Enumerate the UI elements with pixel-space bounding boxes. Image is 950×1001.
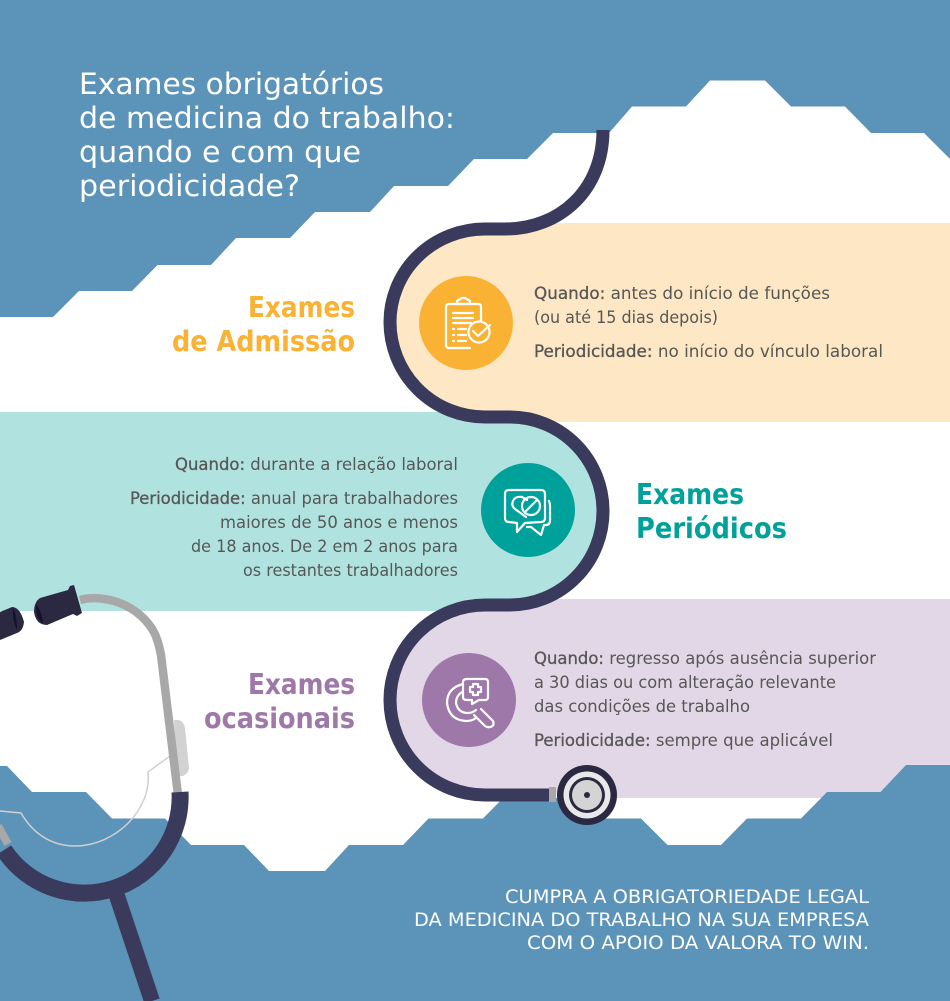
stethoscope tube: [390, 130, 603, 795]
heading: Exames de Admissão: de Admissão: [172, 325, 355, 358]
title: Exames obrigatórios: [79, 67, 384, 101]
icon: chat bubbles with pills: [481, 463, 575, 557]
icon: magnifier with medical cross: [422, 653, 516, 747]
title: periodicidade?: [79, 169, 300, 203]
text: Exames ocasionais details: Quando: regresso após ausência superior: [534, 649, 876, 668]
heading: Exames de Admissão: [172, 291, 355, 358]
title: quando e com que: [79, 135, 361, 169]
text: Exames Periódicos details: os restantes trabalhadores: [243, 561, 458, 580]
heading: Exames Periódicos: Exames: [636, 478, 744, 511]
heading: Exames ocasionais: [204, 668, 355, 735]
panel: Exames Periódicos background: [0, 412, 610, 611]
heading: Exames Periódicos: [636, 478, 787, 545]
text: Exames de Admissão details: (ou até 15 dias depois): [534, 308, 718, 327]
text: Exames Periódicos details: Quando: durante a relação laboral: [175, 455, 458, 474]
footer call to action: COM O APOIO DA VALORA TO WIN.: [527, 932, 869, 954]
heading: Exames ocasionais: ocasionais: [204, 702, 355, 735]
text: Exames Periódicos details: maiores de 50 anos e menos: [220, 513, 458, 532]
text: Exames de Admissão details: Quando: antes do início de funções: [534, 284, 830, 303]
heading: Exames Periódicos: Periódicos: [636, 512, 787, 545]
text: Exames ocasionais details: [534, 649, 876, 750]
title: [79, 67, 455, 203]
heading: Exames ocasionais: Exames: [248, 668, 355, 701]
icon: clipboard with check: [419, 276, 513, 370]
text: Exames Periódicos details: [130, 455, 458, 580]
panel: Exames de Admissão background: [386, 223, 950, 422]
text: Exames Periódicos details: de 18 anos. De 2 em 2 anos para: [191, 537, 458, 556]
title: de medicina do trabalho:: [79, 101, 455, 135]
text: Exames de Admissão details: Periodicidade: no início do vínculo laboral: [534, 342, 883, 361]
heading: Exames de Admissão: Exames: [248, 291, 355, 324]
text: Exames de Admissão details: [534, 284, 883, 361]
text: Exames ocasionais details: a 30 dias ou com alteração relevante: [534, 673, 836, 692]
text: Exames Periódicos details: Periodicidade: anual para trabalhadores: [130, 489, 458, 508]
footer call to action: DA MEDICINA DO TRABALHO NA SUA EMPRESA: [414, 909, 869, 931]
stethoscope headset: [0, 585, 189, 1001]
footer call to action: CUMPRA A OBRIGATORIEDADE LEGAL: [505, 886, 869, 908]
text: Exames ocasionais details: Periodicidade: sempre que aplicável: [534, 731, 833, 750]
background: top blue stepped area: [0, 0, 950, 317]
text: Exames ocasionais details: das condições de trabalho: [534, 697, 750, 716]
stethoscope chest piece: [549, 765, 617, 825]
footer call to action: [414, 886, 869, 954]
panel: Exames ocasionais background: [386, 599, 950, 798]
background: bottom blue stepped area: [0, 765, 950, 1001]
